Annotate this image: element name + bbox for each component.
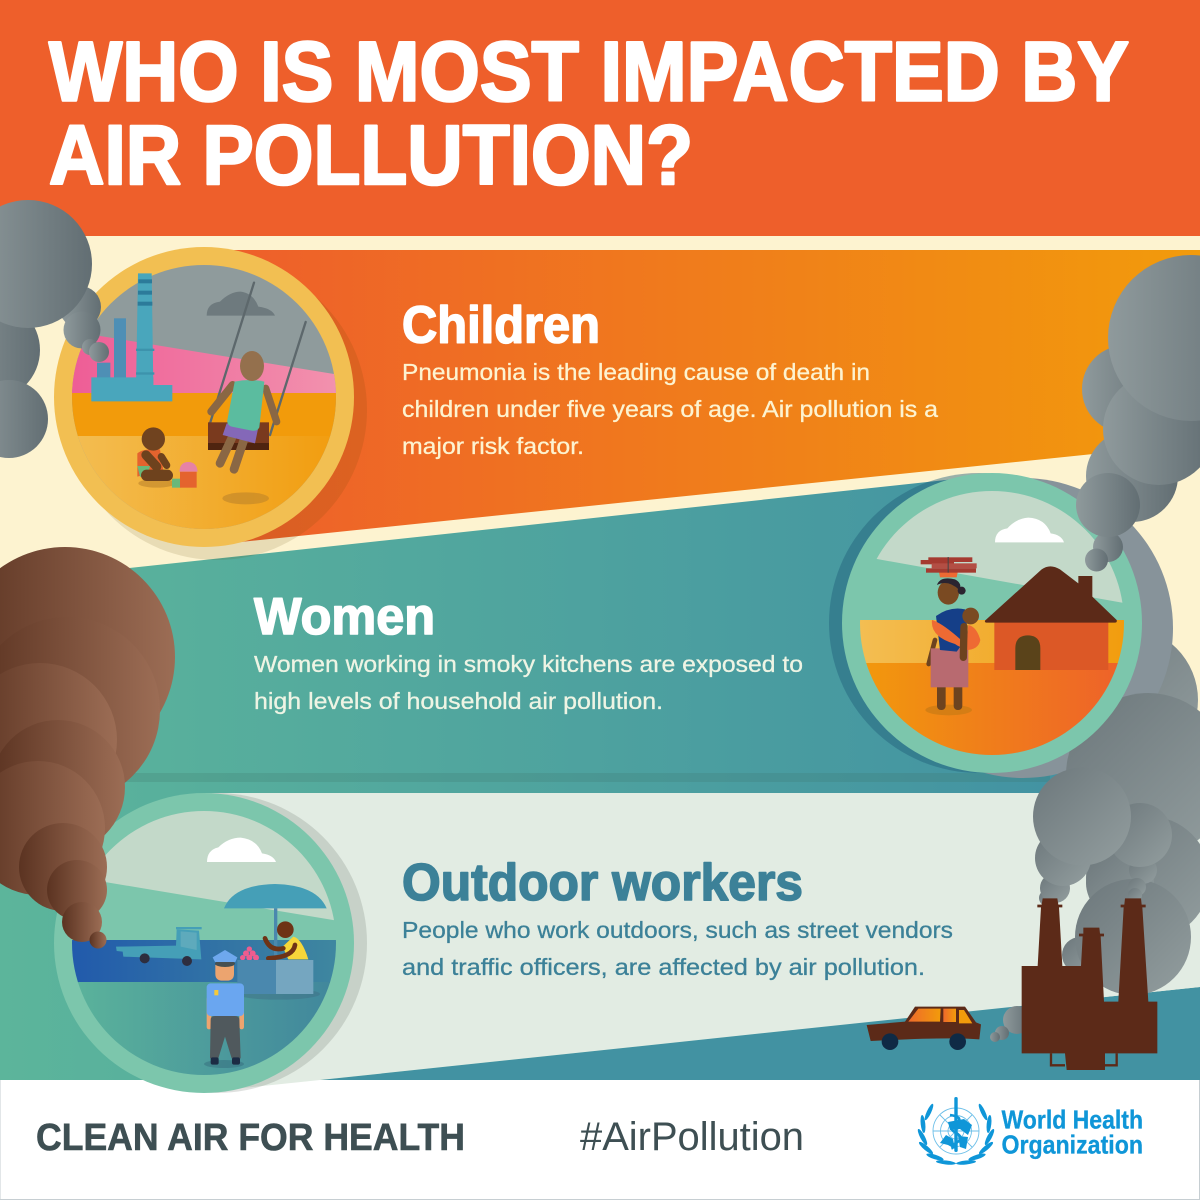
child on swing [211, 351, 277, 469]
icon: car [867, 1007, 981, 1050]
icon: cloud [207, 292, 275, 316]
panel: women band [0, 475, 1075, 1080]
smoke: top left [0, 200, 109, 458]
title: WHO IS MOST IMPACTED BY [49, 24, 1129, 118]
title: AIR POLLUTION? [49, 108, 693, 202]
truck [116, 927, 202, 966]
panel: outdoor workers circle illustration [54, 793, 354, 1093]
text: outdoor workers: People who work outdoors, such as street vendors [402, 917, 953, 943]
text: women [254, 588, 803, 714]
text: children: major risk factor. [402, 433, 584, 459]
text: women: high levels of household air pollution. [254, 688, 663, 714]
smoke: brown left [0, 547, 175, 948]
WHO wordmark: Organization [1002, 1130, 1143, 1160]
text: children: Pneumonia is the leading cause of death in [402, 359, 870, 385]
text: outdoor workers: Outdoor workers [402, 854, 803, 912]
ground shadows [138, 479, 269, 504]
page edge [0, 1080, 1200, 1200]
text: children: children under five years of age. Air pollution is a [402, 396, 938, 422]
footer slogan: CLEAN AIR FOR HEALTH [36, 1117, 465, 1159]
icon: WHO emblem [916, 1097, 996, 1166]
panel: women circle illustration [842, 473, 1142, 773]
woman with child [925, 572, 980, 715]
text: women: Women [254, 588, 435, 646]
toddler [137, 427, 167, 478]
text: children [402, 296, 938, 459]
swing ropes [210, 283, 306, 435]
icon: factory silhouette [1022, 898, 1157, 1070]
head load of wood [921, 557, 977, 573]
text: children: Children [402, 296, 600, 354]
text: outdoor workers: and traffic officers, are affected by air pollution. [402, 954, 925, 980]
toy blocks [172, 462, 198, 488]
icon: cloud [207, 838, 276, 862]
panel: outdoor workers band [204, 793, 1200, 1092]
traffic officer [204, 950, 244, 1068]
panel: children circle illustration [54, 247, 354, 547]
smoke behind women circle [873, 478, 1200, 857]
panel: children band [204, 250, 1200, 546]
smoke: right lower [1033, 768, 1200, 995]
icon: cloud [995, 518, 1064, 542]
text: outdoor workers [402, 854, 953, 980]
footer hashtag: #AirPollution [580, 1115, 804, 1159]
circle shadows [67, 260, 1129, 1093]
text: women: Women working in smoky kitchens are exposed to [254, 651, 803, 677]
band shadow stripe [120, 773, 1050, 782]
title [49, 24, 1129, 202]
header band [0, 0, 1200, 236]
vendor stall [224, 884, 327, 1000]
icon: factory [91, 273, 172, 401]
house [985, 566, 1117, 670]
smoke: right upper [1076, 255, 1200, 572]
WHO wordmark: World Health [1002, 1104, 1143, 1134]
swing seat [208, 422, 269, 450]
icon: car exhaust smoke [990, 1006, 1031, 1042]
WHO wordmark [1002, 1104, 1143, 1160]
